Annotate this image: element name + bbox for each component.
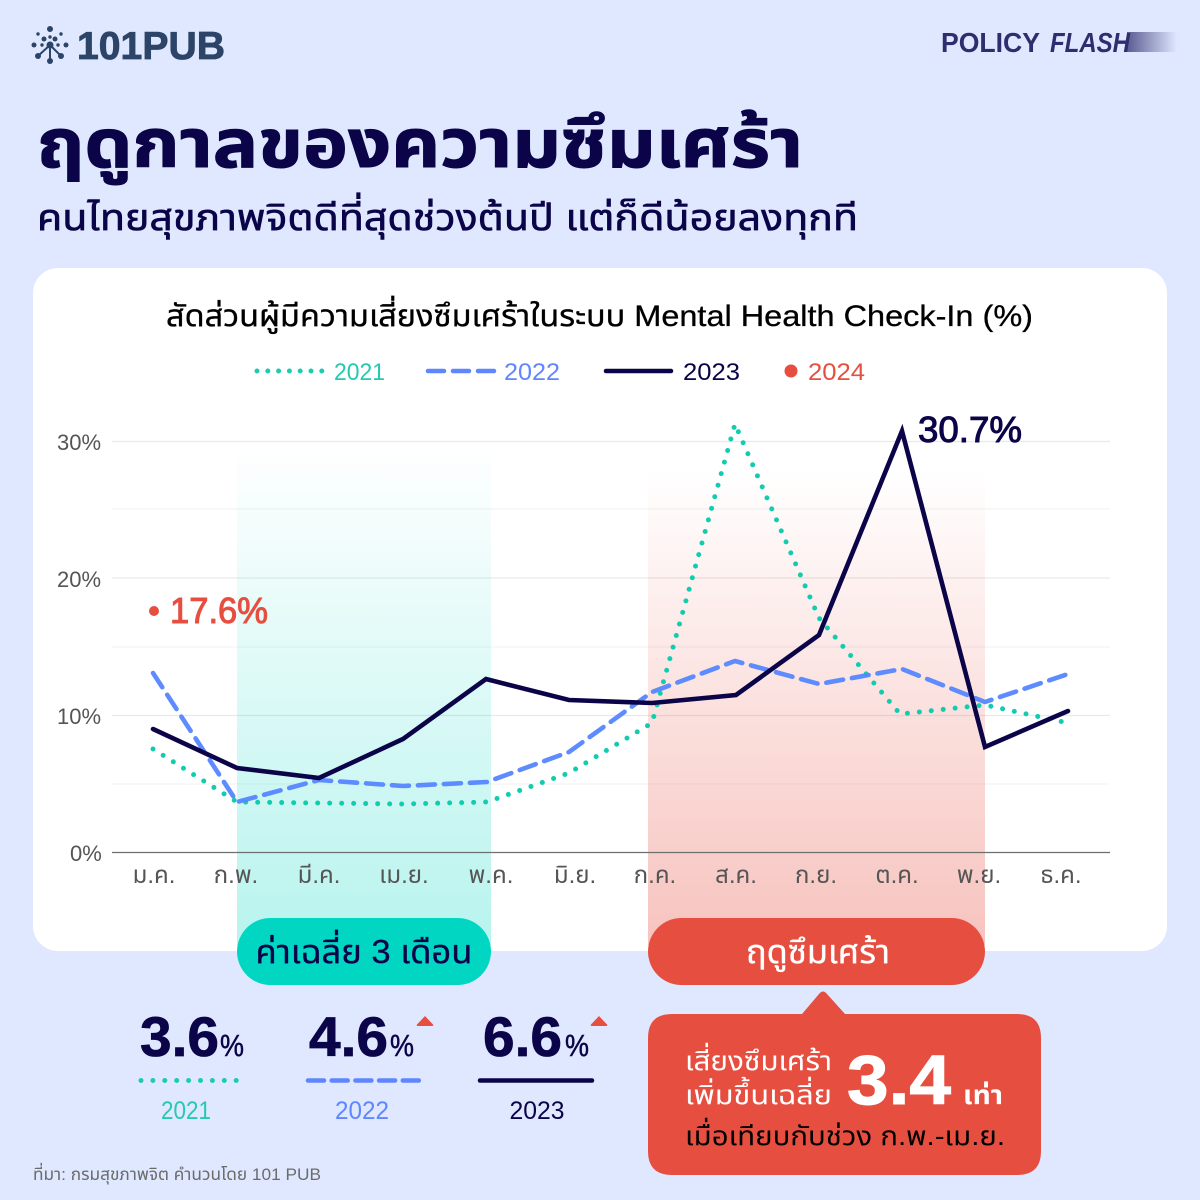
icon: up arrow	[417, 1016, 433, 1026]
x axis labels: ก.ค.	[634, 862, 676, 889]
stat: 2021	[140, 1005, 244, 1125]
highlight: depression season band	[648, 470, 985, 945]
source note: ที่มา: กรมสุขภาพจิต คำนวนโดย 101 PUB	[33, 1162, 321, 1185]
y axis labels: 10%	[57, 704, 101, 729]
stat: 2021: %	[220, 1028, 244, 1063]
x axis labels: ก.พ.	[214, 862, 258, 889]
x axis labels: มี.ค.	[298, 862, 340, 889]
line: 2023	[153, 431, 1068, 778]
data label: 2023 peak: 30.7%	[918, 409, 1022, 450]
pill: three-month average: ค่าเฉลี่ย 3 เดือน	[256, 929, 472, 970]
stat: 2023: 2023	[510, 1097, 564, 1125]
pill: three-month average	[237, 918, 491, 985]
series label: Policy Flash: FLASH	[1050, 27, 1131, 58]
x axis labels: พ.ค.	[469, 862, 513, 889]
chart title: สัดส่วนผู้มีความเสี่ยงซึมเศร้าในระบบ Mental Health Check-In (%)	[166, 295, 1033, 334]
x axis labels: มิ.ย.	[554, 862, 596, 889]
stat: 2023	[480, 1005, 607, 1125]
chart: line chart	[57, 409, 1110, 945]
x axis labels: ม.ค.	[133, 862, 175, 889]
icon: up arrow	[591, 1016, 607, 1026]
stat: 2022: 2022	[335, 1097, 389, 1125]
stat: 2023: 6.6	[483, 1005, 562, 1068]
x axis labels: ก.ย.	[795, 862, 837, 889]
x axis labels: ธ.ค.	[1040, 862, 1082, 889]
y axis labels	[57, 430, 102, 866]
y axis labels: 30%	[57, 430, 101, 455]
callout: 3.4 times	[648, 992, 1041, 1175]
pill: depression season: ฤดูซึมเศร้า	[746, 933, 890, 972]
title: ฤดูกาลของความซึมเศร้า	[37, 106, 803, 185]
series label: Policy Flash	[941, 27, 1177, 58]
x axis labels: ส.ค.	[715, 862, 757, 889]
highlight: three-month average band	[237, 445, 491, 945]
x axis labels: เม.ย.	[379, 862, 429, 889]
stat: 2021: 3.6	[140, 1005, 219, 1068]
x axis labels	[133, 862, 1082, 889]
legend	[257, 359, 865, 386]
callout: 3.4 times: เท่า	[963, 1080, 1003, 1110]
callout: 3.4 times: เสี่ยงซึมเศร้า	[685, 1042, 832, 1076]
x axis labels: ต.ค.	[875, 862, 919, 889]
stat: 2023: %	[565, 1028, 589, 1063]
callout: 3.4 times: เพิ่มขึ้นเฉลี่ย	[685, 1076, 832, 1110]
subtitle: คนไทยสุขภาพจิตดีที่สุดช่วงต้นปี แต่ก็ดีน้อยลงทุกที	[37, 192, 858, 240]
pill: depression season	[648, 918, 985, 985]
x axis labels: พ.ย.	[957, 862, 1001, 889]
stat: 2022: 4.6	[309, 1005, 388, 1068]
legend: 2021	[334, 359, 385, 386]
y axis labels: 0%	[70, 841, 102, 866]
legend: 2024	[808, 359, 865, 386]
data point: 2024 January: 17.6%	[170, 590, 268, 631]
logo: 101 PUB: 101PUB	[77, 25, 225, 68]
legend: 2023	[683, 359, 740, 386]
legend: 2022	[504, 359, 560, 386]
line: 2021	[153, 424, 1068, 804]
y axis labels: 20%	[57, 567, 101, 592]
panel: chart card	[33, 268, 1167, 951]
line: 2022	[153, 661, 1068, 802]
stat: 2021: 2021	[161, 1097, 211, 1125]
stat: 2022	[308, 1005, 433, 1125]
series label: Policy Flash: POLICY	[941, 27, 1040, 58]
callout: 3.4 times: เมื่อเทียบกับช่วง ก.พ.-เม.ย.	[685, 1117, 1005, 1151]
callout: 3.4 times: 3.4	[847, 1041, 951, 1119]
stat: 2022: %	[390, 1028, 414, 1063]
